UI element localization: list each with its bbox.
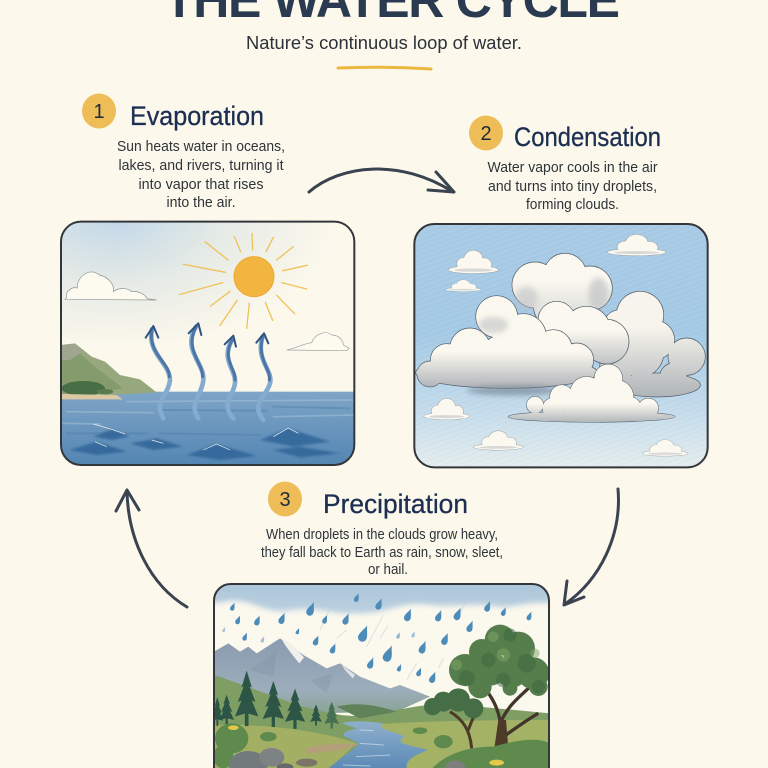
big tree [449,625,549,748]
vapor arrow 2 [189,323,203,418]
rain streaks [320,600,467,680]
step 3 heading: precipitation: 3 [279,489,291,511]
river bank [305,744,358,753]
waves [70,428,340,460]
sun rays [179,233,307,328]
rocks [229,748,465,768]
title underline [338,67,431,69]
step 1 description: Sun heats water in oceans, [117,138,285,155]
step 2 description: and turns into tiny droplets, [488,178,657,195]
sky [410,220,710,470]
step 3 description: When droplets in the clouds grow heavy, [266,526,498,543]
step 1 description: into the air. [166,194,236,211]
main cloud: right mass [600,292,705,397]
frame [414,224,708,467]
small clouds [424,235,688,456]
arrow: precipitation to evaporation [116,490,187,607]
step 2 heading: condensation: Condensation [514,122,661,152]
hills [214,675,550,768]
step 2 heading: condensation [469,116,661,152]
step 3 heading: precipitation: Precipitation [323,489,468,519]
cloud shadow [467,386,560,395]
panel: precipitation illustration [210,580,555,768]
small tree [424,688,483,748]
panel: evaporation illustration [60,220,357,467]
step 3 description: or hail. [368,561,408,578]
meadow [214,725,357,768]
vapor arrow 1 [146,326,170,418]
step 1 description [117,138,285,211]
main cloud: lower front [508,364,675,422]
main cloud: middle mass [538,302,629,367]
step 2 description: forming clouds. [526,196,619,213]
arrow: condensation to precipitation [564,489,618,605]
sky [62,222,300,328]
yellow flowers [228,725,504,766]
step 1 heading: evaporation: 1 [93,101,105,123]
step 1 description: into vapor that rises [138,176,264,193]
step 3 description: they fall back to Earth as rain, snow, sleet, [261,544,503,561]
vapor arrow 3 [225,336,236,418]
sea [60,392,357,467]
cloud right [287,333,349,351]
panel: condensation illustration [410,220,710,470]
step 1 heading: evaporation: Evaporation [130,101,264,131]
rain cloud band [210,580,555,614]
river [329,721,428,768]
foreground bushes [213,723,550,768]
step 3 description [261,526,503,578]
raindrops [222,592,534,684]
mountains [214,638,430,713]
sun [234,257,274,297]
frame [61,222,354,465]
cloud left [65,272,157,300]
sea streaks [63,400,353,435]
main cloud: left mass [416,296,597,388]
arrow: evaporation to condensation [309,169,454,192]
step 2 description: Water vapor cools in the air [488,159,658,176]
step 1 description: lakes, and rivers, turning it [118,157,284,174]
vapor arrow 4 [256,333,270,420]
subtitle: Nature’s continuous loop of water. [246,33,522,53]
step 1 heading: evaporation [82,94,264,131]
main cloud: tower [512,253,613,318]
step 2 heading: condensation: 2 [480,123,492,145]
evaporation arrows [146,323,270,420]
step 2 description [488,159,658,213]
conifers [211,671,339,729]
step 3 heading: precipitation [268,482,468,519]
sky [210,580,555,768]
frame [214,584,549,768]
headland [60,343,157,399]
